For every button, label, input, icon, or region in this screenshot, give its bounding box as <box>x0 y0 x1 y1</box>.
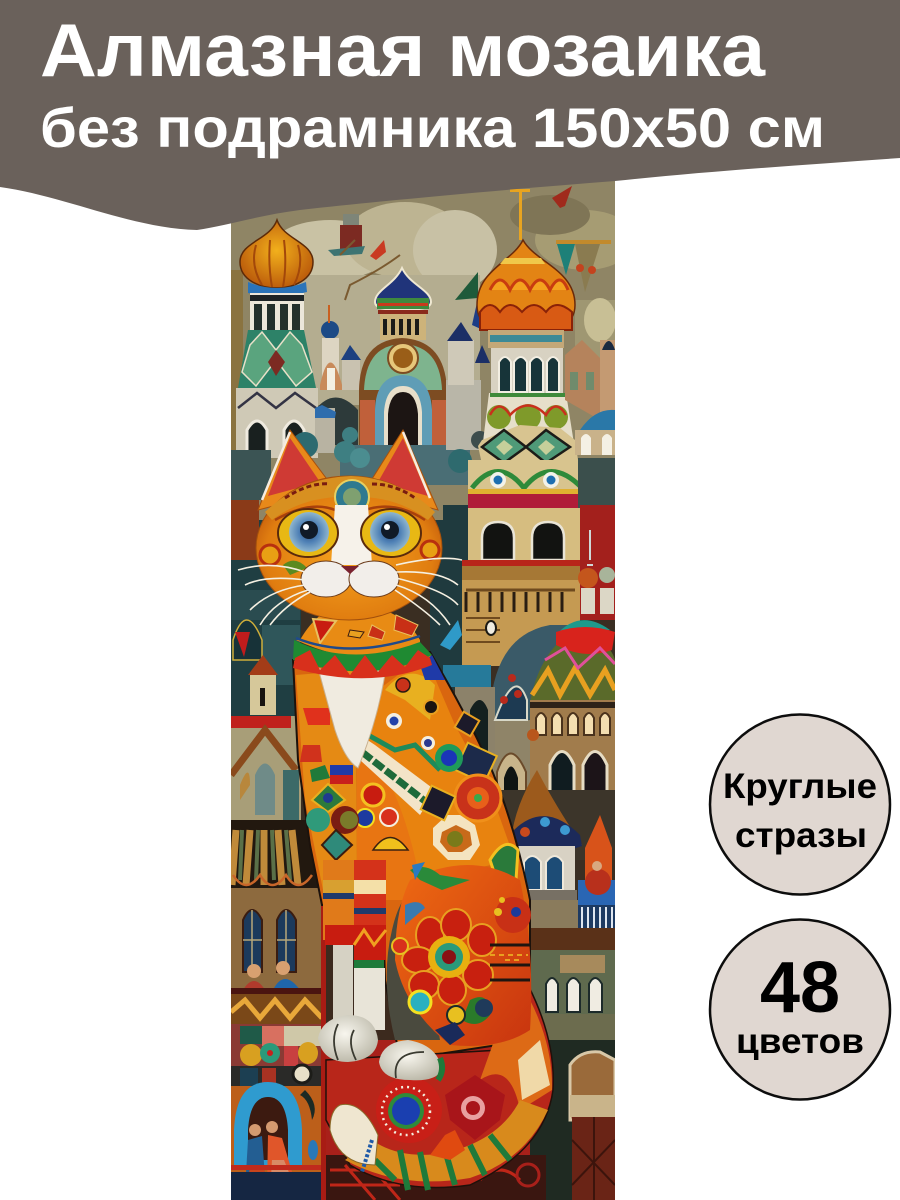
left patchwork <box>231 1024 323 1088</box>
cat: paws <box>318 1015 442 1080</box>
cat: head <box>256 476 442 620</box>
vertical red post <box>321 888 326 1200</box>
right tower with scalloped orange dome <box>468 240 586 510</box>
cat: belly and haunch with flower <box>326 862 553 1190</box>
right eye <box>361 509 421 557</box>
muzzle <box>301 561 399 597</box>
cat: lower body robe <box>293 652 530 1060</box>
blue domes and patterned roof <box>443 620 615 808</box>
painting: cat and city mosaic <box>231 180 635 1200</box>
left zigzag band <box>231 994 323 1024</box>
left eye <box>278 509 338 557</box>
forehead ornament band <box>265 476 435 520</box>
left building with arched windows and figures <box>231 888 321 994</box>
cat: neck <box>296 612 420 654</box>
cat: ears <box>258 430 438 510</box>
blue bird near whiskers <box>440 620 462 650</box>
title line 1: Алмазная мозаика <box>40 8 766 92</box>
lower right domes and windows <box>490 770 615 1200</box>
cat: collar <box>293 636 432 678</box>
badge: round rhinestones: стразы <box>735 816 867 855</box>
icon: hanging lantern in sky <box>328 186 611 330</box>
small chapels beside left tower <box>315 305 361 453</box>
badge: 48 colours: 48 <box>760 948 840 1028</box>
badge: round rhinestones <box>710 714 890 894</box>
painting base tones <box>231 520 615 1040</box>
left mid: teal wall with heart and little tower <box>231 590 301 720</box>
cat: whiskers <box>238 558 462 625</box>
title line 2: без подрамника 150х50 см <box>40 96 825 159</box>
cat: tail wrapping around the base <box>326 985 553 1190</box>
left house with red roof <box>231 716 301 820</box>
left orange wall with blue arch and two women <box>231 1082 323 1200</box>
badge: 48 colours <box>710 920 890 1100</box>
banner: header ribbon <box>0 0 900 230</box>
cat: bib of white fur <box>318 668 386 768</box>
central church with blue dome <box>292 268 490 485</box>
cat: front legs <box>323 860 386 1030</box>
right mid building: tan palace <box>443 505 615 666</box>
left awning with stripes <box>231 820 323 888</box>
bottom dark patterned floor <box>326 1040 546 1200</box>
left tower with golden onion dome <box>231 220 318 458</box>
badge: round rhinestones: Круглые <box>723 767 877 806</box>
white face blaze <box>331 505 372 565</box>
far-right houses <box>231 340 615 560</box>
badge: 48 colours: цветов <box>736 1022 864 1061</box>
sky with clouds <box>231 180 635 520</box>
cat: neck ornaments <box>313 615 418 643</box>
